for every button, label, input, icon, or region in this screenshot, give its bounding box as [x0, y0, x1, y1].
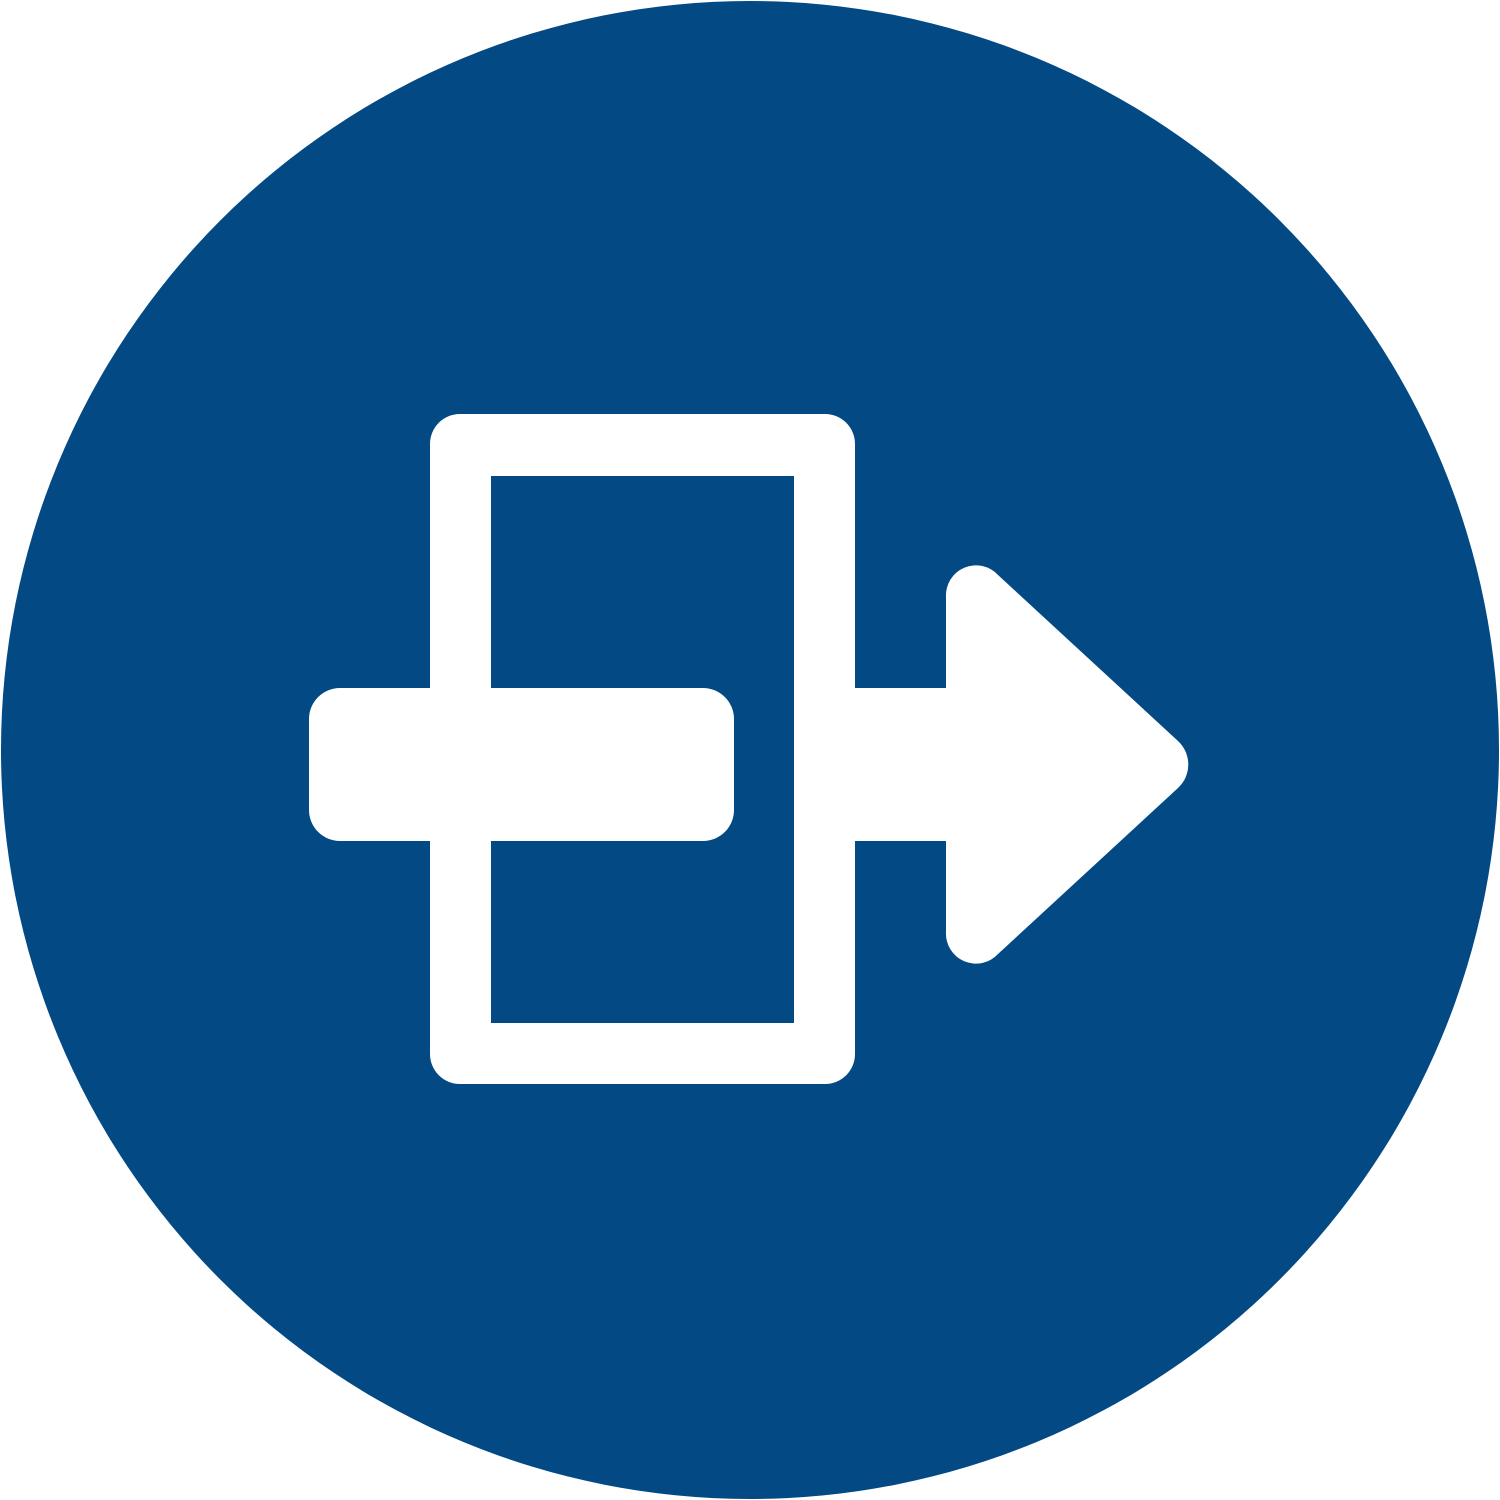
door outline: [430, 414, 855, 1084]
horizontal bar: [309, 688, 734, 841]
arrow: [800, 565, 1188, 964]
